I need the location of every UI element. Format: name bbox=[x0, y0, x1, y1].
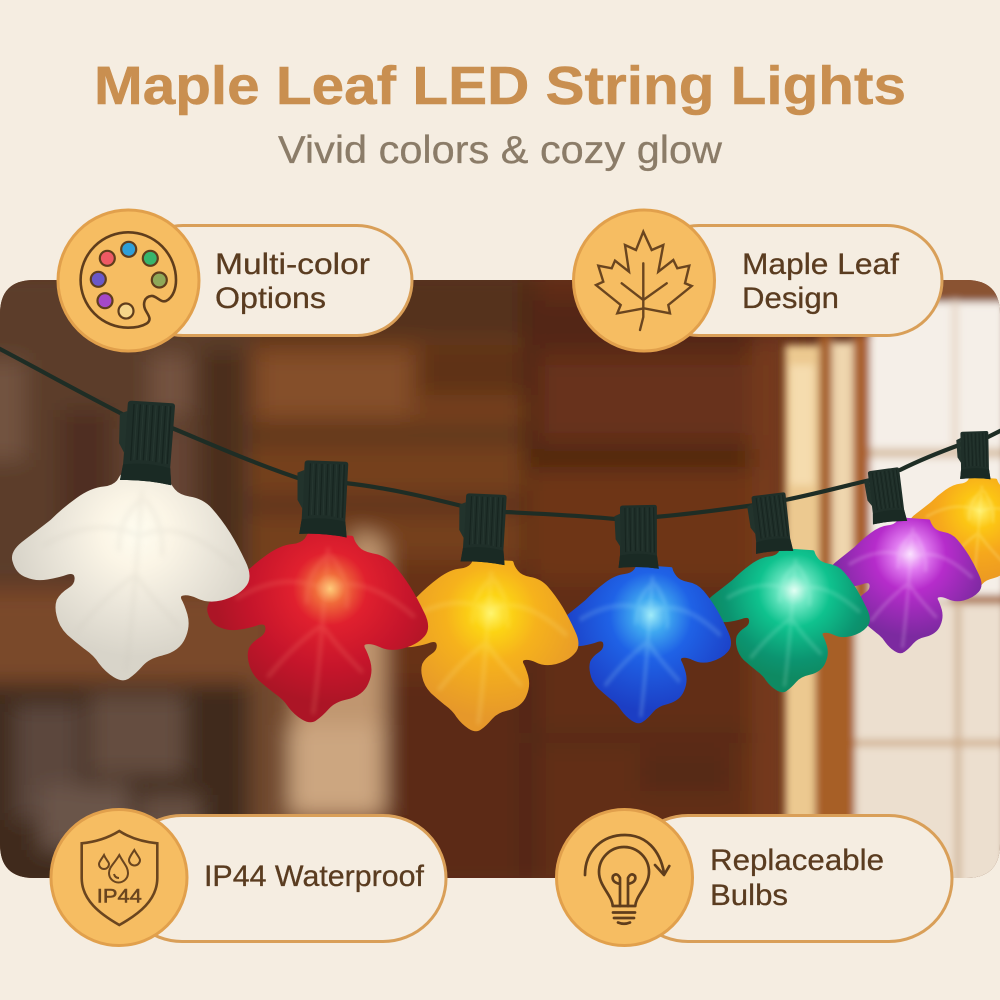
title: Maple Leaf LED String Lights bbox=[94, 56, 906, 116]
label: Bulbs bbox=[710, 879, 788, 912]
bulb: purple leaf bbox=[831, 467, 980, 652]
right pillar and window frame bbox=[785, 345, 819, 825]
icon: maple leaf bbox=[596, 232, 692, 330]
bulb: red leaf bbox=[210, 460, 426, 720]
label: Replaceable bbox=[710, 844, 884, 877]
bulb: blue leaf bbox=[559, 505, 729, 721]
subtitle: Vivid colors & cozy glow bbox=[278, 129, 723, 172]
pill background bbox=[119, 816, 446, 942]
pill background bbox=[644, 226, 942, 336]
label: Design bbox=[742, 282, 839, 315]
label: Maple Leaf bbox=[742, 248, 900, 281]
pill background bbox=[625, 816, 952, 942]
label: Multi-color bbox=[215, 248, 370, 281]
label: IP44 Waterproof bbox=[204, 860, 425, 893]
label: Options bbox=[215, 282, 326, 315]
light string wire bbox=[0, 348, 1000, 520]
icon: light bulb with rotation arrow bbox=[585, 835, 669, 924]
feature: replaceable bulbs bbox=[556, 810, 952, 946]
panel: photo of cabin interior background bbox=[0, 270, 1000, 897]
icon badge circle bbox=[58, 210, 199, 351]
icon badge circle bbox=[556, 810, 692, 946]
feature: IP44 waterproof bbox=[51, 810, 446, 946]
icon badge circle bbox=[574, 210, 714, 351]
icon badge circle bbox=[51, 810, 187, 946]
feature: maple leaf design bbox=[574, 210, 942, 351]
feature: multi-color options bbox=[58, 210, 412, 351]
bulb: yellow leaf bbox=[388, 493, 576, 729]
bulb: white leaf bbox=[14, 400, 247, 678]
bulb: orange leaf bbox=[910, 431, 1000, 591]
bulb: green leaf bbox=[708, 492, 868, 690]
icon: shield with water drops bbox=[82, 831, 157, 925]
icon: shield with water drops: IP44 bbox=[97, 886, 142, 908]
pill background bbox=[128, 226, 412, 336]
icon: paint palette bbox=[81, 232, 176, 328]
